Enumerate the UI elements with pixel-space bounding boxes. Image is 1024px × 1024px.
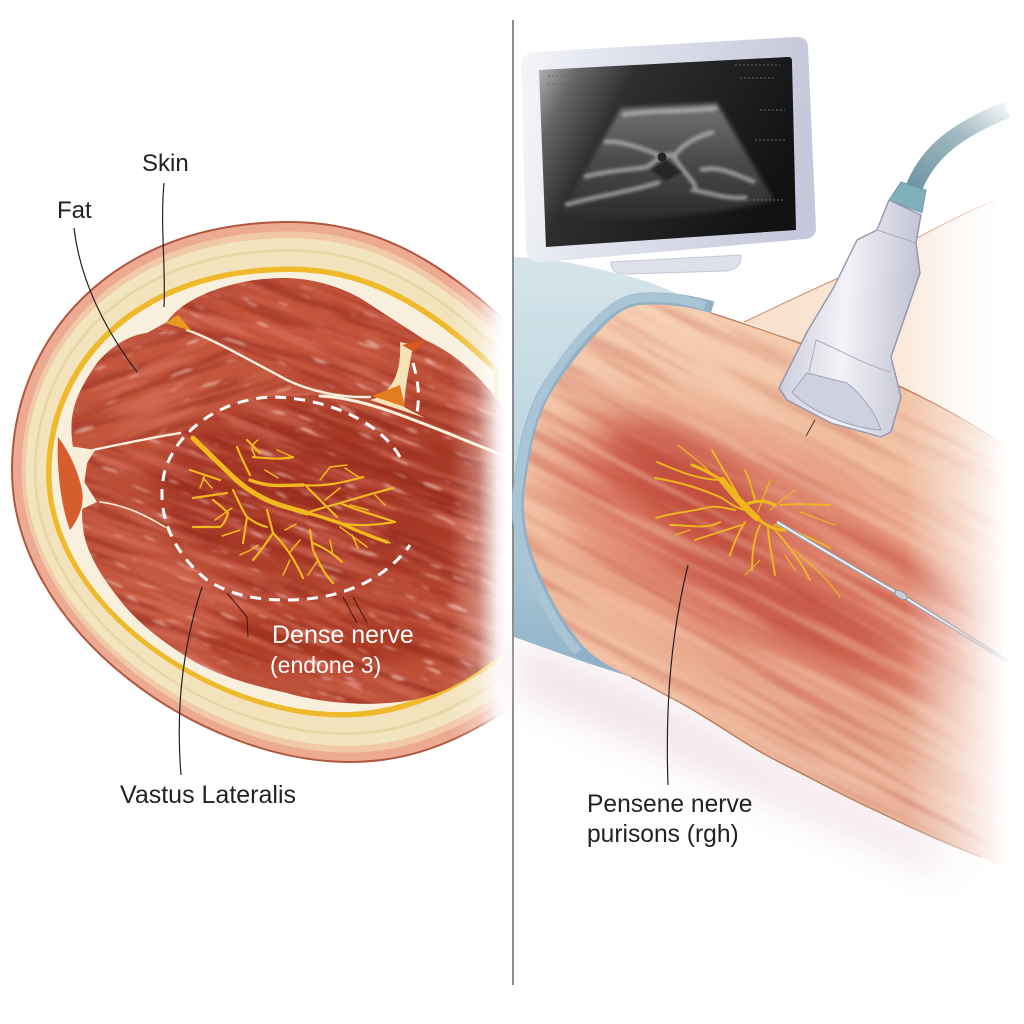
right fade [905,170,1005,890]
fat layers [22,231,521,753]
label: skin: Skin [142,150,189,177]
needle [777,522,1012,664]
label: right nerve caption: Pensene nerve [587,791,752,818]
label: vastus lateralis: Vastus Lateralis [120,781,296,809]
nerve branches [190,438,395,583]
nerve ticks [227,593,367,637]
muscle glow [524,304,981,836]
probe [779,182,926,437]
muscle compartments [71,278,502,704]
screen readouts [548,65,785,200]
panel: leg with probe [507,36,1010,870]
panel: thigh cross-section [11,221,502,763]
label: endone 3: (endone 3) [270,652,381,678]
upper lateral compartment [72,330,325,449]
orange fat patches [58,315,425,530]
nerve cluster [655,445,840,597]
shadow below leg [514,640,975,868]
monitor [521,37,816,274]
ultrasound image [557,103,774,220]
muscle fibres [72,278,496,704]
nerve region dashed outline [162,363,418,600]
other leg outline [744,198,1000,322]
other leg [744,188,1024,470]
center divider [512,20,514,985]
leg body [524,304,1024,878]
label: fat: Fat [57,197,92,224]
label: right nerve caption [587,565,752,848]
leg outline [631,313,1024,857]
label: dense nerve: Dense nerve [272,621,414,649]
fascia separators [70,330,510,527]
cuff rim [524,304,711,647]
label: vastus lateralis [120,587,296,809]
small tick [806,420,815,436]
label: right nerve caption: purisons (rgh) [587,821,739,848]
leg fibres [524,304,972,836]
label: fat [57,197,137,372]
cuff rim highlight [517,297,705,652]
cable [913,110,1007,190]
right edge white [1004,170,1024,890]
cuff [514,257,711,677]
cuff tail [572,640,631,677]
right side fade [450,210,506,770]
skin ring [12,222,530,762]
